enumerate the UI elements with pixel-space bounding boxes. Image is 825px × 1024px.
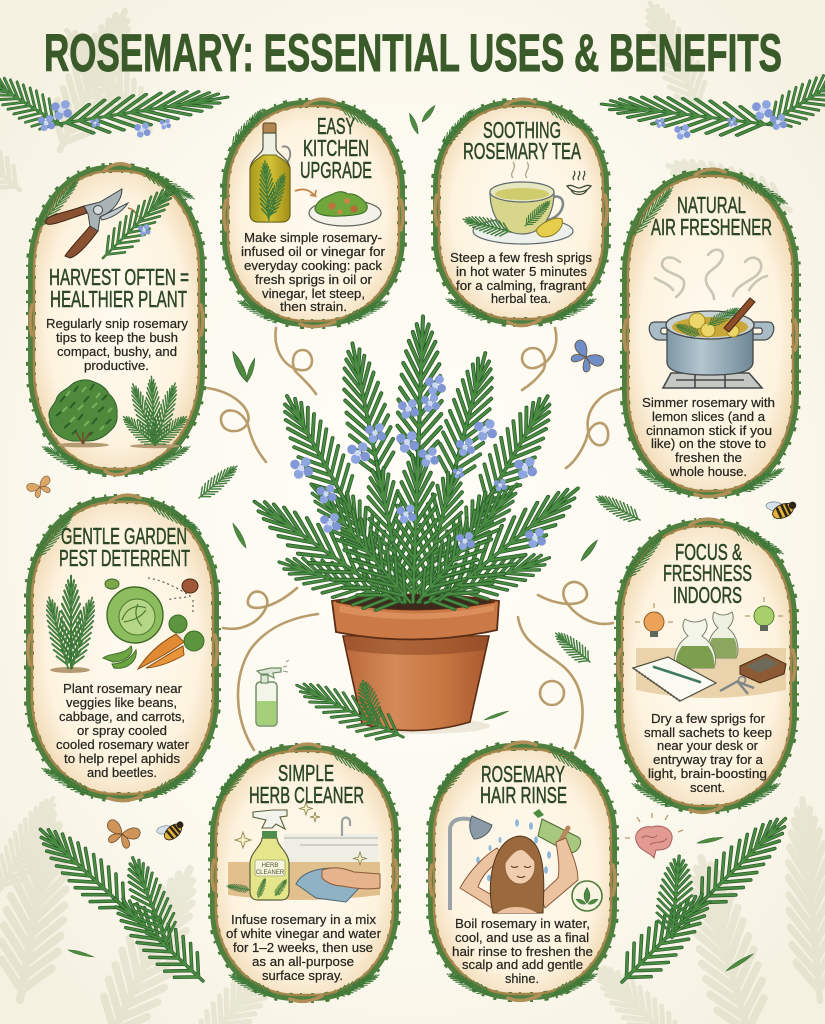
body text [644,711,772,795]
heading: SIMPLE [278,760,334,786]
icon: bushy healthy plant [49,380,117,447]
body text: Infuse rosemary in a mix [231,912,376,927]
body text: Plant rosemary near [63,681,183,696]
body text [241,230,386,314]
body text: Steep a few fresh sprigs [450,250,592,265]
body text: scalp and add gentle [462,957,583,972]
icon: pruning shears [45,189,138,258]
body text [452,916,593,986]
panel: harvest often [30,164,203,475]
leafy frame sprigs [31,498,201,799]
leafy frame sprigs [627,172,789,496]
heading [651,192,772,240]
leafy frame sprigs [227,102,390,327]
leafy frame sprigs [215,747,382,1001]
body text: surface spray. [262,968,343,983]
heading: HAIR RINSE [480,782,567,808]
icon: desk [636,648,786,698]
icon: pests and dashed path [105,578,198,614]
panel: rosemary hair rinse [430,742,615,1000]
heading [663,539,752,608]
panel: focus and freshness indoors [618,519,795,812]
body text: herbal tea. [491,291,551,306]
garland: top right [600,60,825,141]
icon: notebook and pen [633,657,716,701]
body text: hair rinse to freshen the [452,944,593,959]
sprig: bottom right corner [609,805,799,995]
icon: salad plate [309,192,381,226]
garland: top left [0,65,230,140]
heading [463,117,581,164]
heading: GENTLE GARDEN [61,523,187,549]
body text: tips to keep the bush [56,330,178,345]
body text [642,395,775,479]
icon: shower head and water [450,816,551,910]
blue flowers [290,375,546,550]
heading: UPGRADE [300,157,372,183]
body text: whole house. [669,464,747,479]
body text [56,681,190,780]
icon: brain [625,813,683,858]
body text: cabbage, and carrots, [59,709,185,724]
body text: then strain. [280,299,347,314]
heading: FOCUS & [675,539,742,565]
icon: arrow [295,189,316,196]
panel: gentle garden pest deterrent [28,495,217,801]
heading [59,523,190,571]
icon: spray bottle [256,660,289,726]
icon: leaf badge [572,881,602,911]
panel: simple herb cleaner [212,744,397,1001]
body text: everyday cooking: pack [244,258,382,273]
heading: PEST DETERRENT [59,545,190,571]
icon: rinse bottle [533,809,581,853]
icon: oil bottle [250,123,290,222]
heading: HERB CLEANER [249,782,364,808]
body text: light, brain-boosting [648,766,767,781]
heading: KITCHEN [303,135,369,161]
icon: carrots and peas [103,615,204,669]
body text: Regularly snip rosemary [46,316,188,331]
body text: near your desk or [657,738,759,753]
body text: Boil rosemary in water, [455,916,590,931]
terracotta pot [332,594,499,734]
body text: compact, bushy, and [57,344,177,359]
heading [480,761,567,808]
body text [226,912,382,983]
heading [249,760,364,808]
heading: INDOORS [673,582,742,608]
panel: natural air freshener [624,169,797,497]
body text: as an all-purpose [252,954,354,969]
icon: tray and keys [720,654,786,694]
icon: cleaner spray bottle [226,810,289,900]
heading: SOOTHING [483,117,561,143]
body text: cinnamon stick if you [646,423,772,438]
body text: Dry a few sprigs for [651,711,766,726]
leafy frame sprigs [438,102,598,325]
heading: FRESHNESS [663,560,752,586]
icon: rosemary sprig [94,178,183,267]
body text: freshen the [675,450,742,465]
body text: productive. [84,358,149,373]
decorative curling vines [207,328,621,750]
icon: bee lower [153,812,187,846]
icon: cleaner spray bottle: HERB [262,863,278,869]
body text: fresh sprigs in oil or [255,272,373,287]
leafy frame sprigs [621,522,785,811]
body text: Simmer rosemary with [642,395,775,410]
body text: and beetles. [87,765,157,780]
body text: veggies like beans, [66,695,177,710]
icon: woman rinsing hair [460,836,578,913]
icon: cabbage [107,587,163,643]
cut sprigs at pot base [290,672,410,751]
icon: tan butterfly lower [102,818,142,851]
heading: NATURAL [677,192,746,218]
icon: kitchen counter and sink [228,818,380,900]
body text: to help repel aphids [64,751,180,766]
icon: steam curls [655,250,767,299]
panel: soothing rosemary tea [435,99,607,326]
heading [300,113,372,183]
plant branches [243,316,590,620]
body text: shine. [505,971,539,986]
central potted rosemary plant [243,316,590,751]
icon: tea cup with sprig and lemon [461,162,573,244]
sprig: bottom left corner [27,816,216,995]
body text: like) on the stove to [651,436,766,451]
body text: lemon slices (and a [652,409,766,424]
icon: steam dish [567,171,591,194]
heading [49,264,189,312]
body text: Make simple rosemary- [244,230,382,245]
heading: HEALTHIER PLANT [50,286,187,312]
heading: ROSEMARY [481,761,565,787]
icon: cleaner spray bottle: CLEANER [256,870,285,876]
body text: infused oil or vinegar for [241,244,386,259]
leafy frame sprigs [33,167,196,474]
icon: blue butterfly [565,338,606,377]
icon: small rosemary plants [40,576,101,673]
scattered leaves [68,104,754,973]
body text [450,250,592,306]
body text: in hot water 5 minutes [456,264,587,279]
icon: simmering pot on stove [649,298,774,388]
icon: bee right [762,490,799,523]
leafy frame sprigs [433,745,600,1000]
icon: tan butterfly [26,475,55,500]
body text: entryway tray for a [653,752,764,767]
icon: hand wiping with cloth [296,868,380,902]
body text: or spray cooled [77,723,167,738]
body text: cooled rosemary water [56,737,190,752]
body text [46,316,188,373]
icon: herb sachets [674,612,738,668]
panel: easy kitchen upgrade [224,99,403,327]
body text: for a calming, fragrant [456,278,586,293]
icon: light bulbs [635,597,783,637]
body text: scent. [690,780,725,795]
icon: sparkles [235,802,366,865]
body text: small sachets to keep [644,725,772,740]
icon: leggy plant [119,376,191,450]
heading: EASY [317,113,355,139]
body text: cool, and use as a final [455,930,589,945]
body text: of white vinegar and water [226,926,382,941]
heading: ROSEMARY TEA [463,138,581,164]
heading: HARVEST OFTEN = [49,264,189,290]
body text: vinegar, let steep, [262,286,365,301]
body text: for 1–2 weeks, then use [233,940,373,955]
